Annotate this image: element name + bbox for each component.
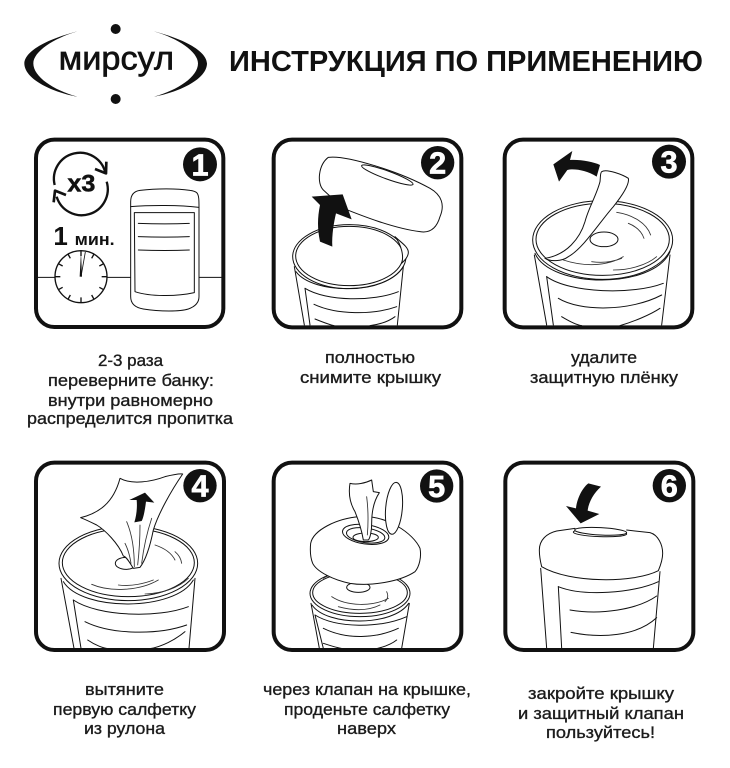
caption: step 3 bbox=[530, 348, 679, 387]
panel: step 2 bbox=[274, 140, 461, 327]
caption: step 4: первую салфетку bbox=[53, 700, 197, 719]
caption: step 2: полностью bbox=[325, 348, 415, 367]
label: one minute: мин. bbox=[75, 230, 115, 249]
caption: step 6: пользуйтесь! bbox=[546, 723, 655, 742]
caption: step 5: через клапан на крышке, bbox=[263, 680, 471, 699]
canister with film bbox=[533, 201, 673, 326]
label: one minute bbox=[53, 221, 115, 251]
arrow up bbox=[129, 493, 154, 522]
caption: step 5 bbox=[263, 680, 471, 738]
caption: step 2 bbox=[300, 348, 442, 387]
badge: 4: 4 bbox=[191, 470, 209, 504]
caption: step 2: снимите крышку bbox=[300, 368, 442, 387]
badge: 2 bbox=[421, 146, 454, 181]
arrow left bbox=[553, 151, 600, 182]
badge: 1: 1 bbox=[191, 148, 209, 182]
closed canister bbox=[539, 526, 663, 648]
caption: step 1: 2-3 раза bbox=[98, 351, 164, 370]
arrow up bbox=[312, 194, 352, 247]
caption: step 3: удалите bbox=[571, 348, 637, 367]
logo bbox=[24, 24, 207, 104]
caption: step 6 bbox=[518, 684, 684, 742]
badge: 5: 5 bbox=[428, 470, 445, 504]
title: ИНСТРУКЦИЯ ПО ПРИМЕНЕНИЮ bbox=[229, 46, 703, 78]
badge: 2: 2 bbox=[429, 147, 446, 181]
caption: step 5: проденьте салфетку bbox=[284, 700, 451, 719]
arrow down bbox=[566, 483, 601, 523]
icon: clock bbox=[55, 251, 107, 303]
wipe through valve bbox=[349, 480, 379, 540]
badge: 4 bbox=[183, 469, 217, 504]
panel: step 5 bbox=[274, 463, 461, 650]
badge: 6: 6 bbox=[661, 470, 678, 504]
caption: step 5: наверх bbox=[337, 719, 397, 738]
protective film bbox=[545, 171, 629, 261]
panel: step 4 bbox=[36, 463, 224, 650]
flap bbox=[383, 482, 405, 535]
badge: 3: 3 bbox=[660, 146, 678, 180]
lid bbox=[319, 157, 442, 232]
badge: 3 bbox=[652, 145, 686, 180]
canister top bbox=[59, 526, 198, 649]
lid with opening bbox=[310, 517, 421, 584]
label: one minute: 1 bbox=[53, 221, 68, 251]
caption: step 1: внутри равномерно bbox=[48, 391, 213, 410]
caption: step 6: закройте крышку bbox=[528, 684, 675, 703]
wet wipe bbox=[81, 474, 183, 568]
icon: rotate three times: x3 bbox=[67, 171, 95, 198]
caption: step 4: вытяните bbox=[85, 680, 164, 699]
caption: step 4 bbox=[53, 680, 197, 738]
caption: step 4: из рулона bbox=[84, 719, 166, 738]
caption: step 1: распределится пропитка bbox=[27, 409, 234, 428]
canister open bbox=[293, 225, 408, 326]
icon: rotate three times bbox=[54, 153, 108, 215]
panel: step 6 bbox=[505, 463, 693, 650]
caption: step 1: переверните банку: bbox=[48, 371, 214, 390]
panel: step 3 bbox=[505, 140, 692, 327]
icon: canister bbox=[131, 189, 199, 311]
logo: мирсул bbox=[59, 40, 174, 77]
canister below lid bbox=[310, 570, 410, 649]
caption: step 3: защитную плёнку bbox=[530, 368, 679, 387]
badge: 1 bbox=[183, 147, 217, 182]
badge: 5 bbox=[420, 469, 453, 504]
panel: step 1 bbox=[36, 140, 223, 327]
caption: step 1 bbox=[27, 351, 234, 428]
caption: step 6: и защитный клапан bbox=[518, 704, 684, 723]
badge: 6 bbox=[653, 469, 686, 504]
